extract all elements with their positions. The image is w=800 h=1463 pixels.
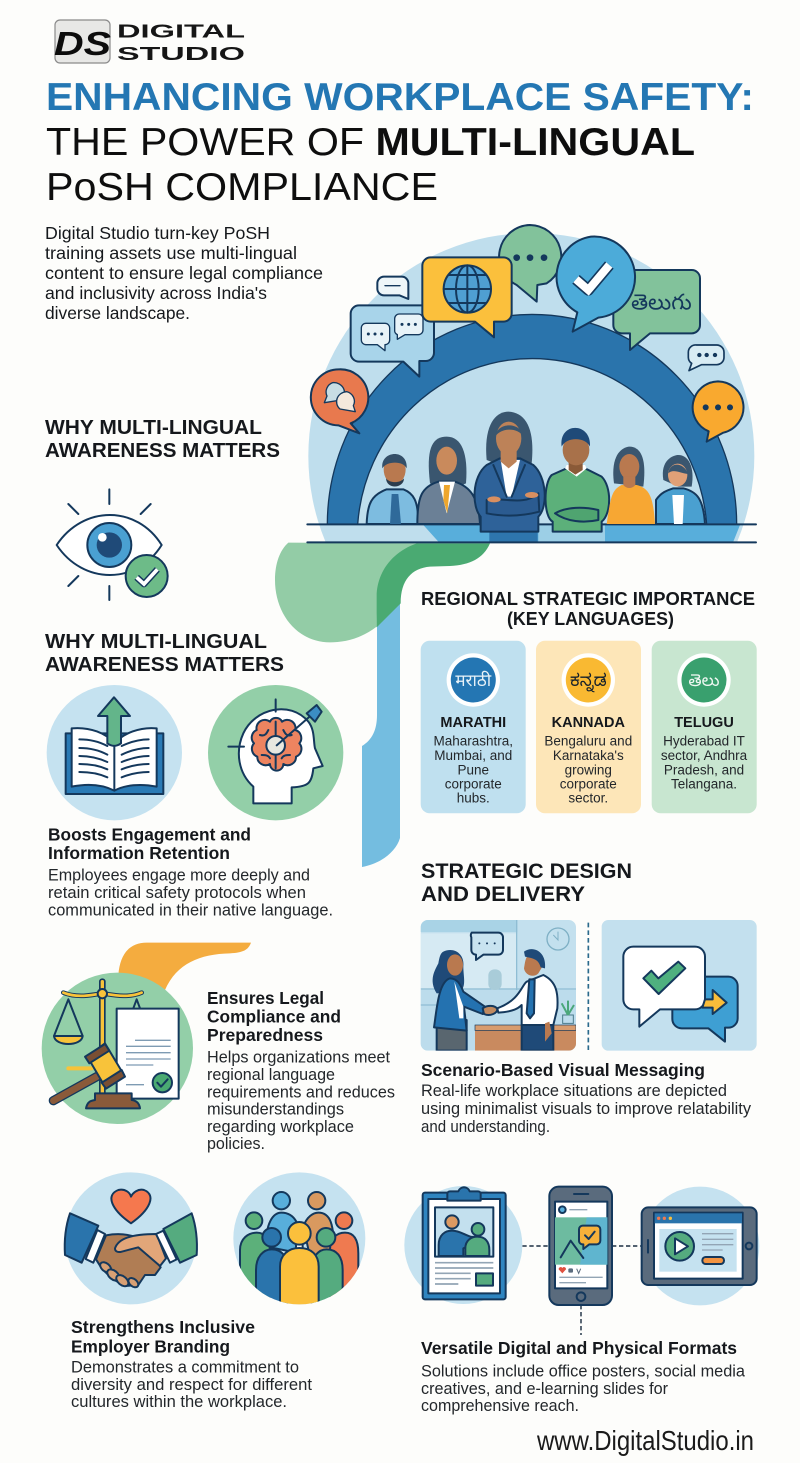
text: ensures legal compliance: requirements and reduces: [207, 1083, 395, 1101]
green swoosh: [275, 543, 490, 642]
card: Telugu: తెలు: [688, 671, 720, 690]
person 6: [656, 455, 705, 524]
website url: www.DigitalStudio.in: [536, 1425, 754, 1456]
card: Marathi: [421, 641, 526, 813]
icons: handshake and diverse group: [65, 1172, 365, 1307]
card: Marathi: Maharashtra,: [434, 734, 513, 749]
text: scenario-based visual messaging: Scenario-Based Visual Messaging: [421, 1060, 705, 1080]
card: Telugu: Pradesh, and: [664, 762, 744, 777]
text: strengthens inclusive employer branding: Employer Branding: [71, 1336, 230, 1356]
text: versatile digital and physical formats: creatives, and e-learning slides for: [421, 1380, 668, 1398]
text: scenario-based visual messaging: Real-life workplace situations are depicted: [421, 1082, 727, 1100]
title: [46, 76, 754, 209]
text: versatile digital and physical formats: comprehensive reach.: [421, 1397, 579, 1415]
text: strengthens inclusive employer branding: diversity and respect for different: [71, 1376, 312, 1394]
card: Telugu: Hyderabad IT: [663, 734, 745, 749]
text: versatile digital and physical formats: [421, 1338, 746, 1415]
heading: regional strategic importance: REGIONAL STRATEGIC IMPORTANCE: [421, 589, 755, 609]
heading: why multi-lingual (second): AWARENESS MATTERS: [45, 653, 284, 676]
icon: diverse group: [233, 1172, 365, 1307]
icon: handshake with heart: [65, 1172, 197, 1304]
icons: digital and physical formats: [404, 1186, 759, 1335]
text: ensures legal compliance: regional language: [207, 1066, 335, 1084]
bubble: orange chat: [311, 369, 368, 433]
person 3: [475, 412, 545, 532]
text: ensures legal compliance: Helps organizations meet: [207, 1048, 390, 1066]
orange swoosh: [118, 943, 251, 990]
card: Kannada: growing: [565, 762, 612, 777]
text: ensures legal compliance: Ensures Legal: [207, 988, 324, 1008]
card: Marathi: मराठी: [455, 670, 492, 690]
card: Marathi: MARATHI: [440, 715, 506, 731]
bubble: green dots: [499, 225, 561, 302]
language cards: [421, 641, 757, 813]
icon: clipboard poster: [404, 1186, 522, 1304]
card: Telugu: TELUGU: [674, 715, 734, 731]
icon: book: [47, 685, 182, 820]
heading: why multi-lingual (first): WHY MULTI-LINGUAL: [45, 416, 262, 439]
bubble: telugu: [613, 270, 700, 350]
heading: regional strategic importance: (KEY LANGUAGES): [507, 609, 674, 629]
title: THE POWER OF MULTI-LINGUAL: [46, 121, 695, 164]
logo: Digital Studio: STUDIO: [117, 43, 245, 64]
bubble: small dots: [688, 345, 724, 371]
text: strengthens inclusive employer branding: Strengthens Inclusive: [71, 1317, 255, 1337]
text: versatile digital and physical formats: Versatile Digital and Physical Formats: [421, 1338, 737, 1358]
card: Kannada: ಕನ್ನಡ: [570, 671, 607, 693]
heading: strategic design and delivery: STRATEGIC DESIGN: [421, 860, 632, 883]
card: Telugu: Telangana.: [671, 777, 737, 792]
logo: Digital Studio: [54, 20, 245, 64]
card: Kannada: corporate: [560, 777, 617, 792]
divider: [586, 923, 591, 1050]
text: boosts engagement: [48, 824, 333, 919]
text: scenario-based visual messaging: [421, 1060, 752, 1136]
intro text: Digital Studio turn-key PoSH: [45, 223, 270, 243]
text: boosts engagement: Boosts Engagement and: [48, 824, 251, 844]
card: Kannada: KANNADA: [552, 715, 625, 731]
text: boosts engagement: communicated in their native language.: [48, 901, 333, 919]
card: Marathi: Mumbai, and: [434, 748, 512, 763]
card: Kannada: [536, 641, 641, 813]
heading: why multi-lingual (first): [45, 416, 280, 462]
text: versatile digital and physical formats: Solutions include office posters, social media: [421, 1362, 746, 1380]
card: Marathi: hubs.: [457, 791, 490, 806]
bubble: blue check: [557, 237, 635, 332]
heading: why multi-lingual (second): [45, 630, 284, 676]
bubble: telugu: తెలుగు: [631, 289, 692, 314]
title: ENHANCING WORKPLACE SAFETY:: [46, 76, 754, 119]
heading: why multi-lingual (first): AWARENESS MATTERS: [45, 439, 280, 462]
icon: tablet: [641, 1187, 759, 1305]
icon: head with brain and target: [208, 685, 343, 820]
text: boosts engagement: retain critical safety protocols when: [48, 884, 306, 902]
text: scenario-based visual messaging: using minimalist visuals to improve relatability: [421, 1100, 752, 1118]
text: strengthens inclusive employer branding: Demonstrates a commitment to: [71, 1358, 299, 1376]
bubble: yellow globe: [422, 257, 512, 337]
pale background circle: [308, 234, 754, 542]
text: boosts engagement: Information Retention: [48, 843, 230, 863]
icon: scales, document and gavel: [42, 943, 251, 1124]
intro text: content to ensure legal compliance: [45, 263, 323, 283]
text: scenario-based visual messaging: and understanding.: [421, 1118, 550, 1136]
text: ensures legal compliance: policies.: [207, 1135, 265, 1153]
bubble: orange dots: [693, 381, 743, 442]
card: Kannada: Karnataka's: [553, 748, 624, 763]
intro text: training assets use multi-lingual: [45, 243, 297, 263]
panel: office handshake: [421, 920, 576, 1051]
floor band: [423, 525, 740, 542]
text: ensures legal compliance: Preparedness: [207, 1025, 323, 1045]
blue ribbon: [362, 560, 400, 867]
icon: eye with check: [57, 489, 168, 600]
intro text: diverse landscape.: [45, 303, 190, 323]
icon: phone: [549, 1187, 612, 1305]
card: Telugu: sector, Andhra: [661, 748, 748, 763]
card: Kannada: sector.: [568, 791, 608, 806]
illustration: diverse team under arch with speech bubbles: [306, 224, 757, 544]
heading: why multi-lingual (second): WHY MULTI-LINGUAL: [45, 630, 267, 653]
text: strengthens inclusive employer branding: [71, 1317, 312, 1411]
person 4: [546, 428, 609, 532]
card: Kannada: Bengaluru and: [544, 734, 632, 749]
person 5: [607, 447, 655, 524]
logo: Digital Studio: DS: [54, 25, 111, 62]
text: strengthens inclusive employer branding: cultures within the workplace.: [71, 1393, 287, 1411]
person 1: [367, 454, 418, 524]
card: Marathi: corporate: [445, 777, 502, 792]
panel: check and arrow bubbles: [602, 920, 757, 1051]
heading: strategic design and delivery: [421, 860, 632, 906]
text: boosts engagement: Employees engage more deeply and: [48, 866, 310, 884]
icons: book and brain: [47, 685, 343, 820]
card: Marathi: Pune: [458, 762, 489, 777]
logo: Digital Studio: DIGITAL: [117, 20, 245, 42]
arch: [327, 314, 737, 524]
connectors: [522, 1246, 642, 1335]
card: Telugu: [652, 641, 757, 813]
intro text: [45, 223, 323, 323]
person 2: [417, 437, 480, 524]
heading: strategic design and delivery: AND DELIVERY: [421, 883, 585, 906]
bubble: blue with two chats: [351, 305, 434, 377]
heading: regional strategic importance: [421, 589, 755, 629]
illustrations: scenario panels: [421, 920, 757, 1051]
text: ensures legal compliance: misunderstandings: [207, 1101, 344, 1119]
text: ensures legal compliance: regarding workplace: [207, 1118, 354, 1136]
text: ensures legal compliance: Compliance and: [207, 1006, 341, 1026]
text: ensures legal compliance: [207, 988, 395, 1153]
bubble: small dash: [377, 277, 408, 299]
title: PoSH COMPLIANCE: [46, 166, 438, 209]
intro text: and inclusivity across India's: [45, 283, 267, 303]
